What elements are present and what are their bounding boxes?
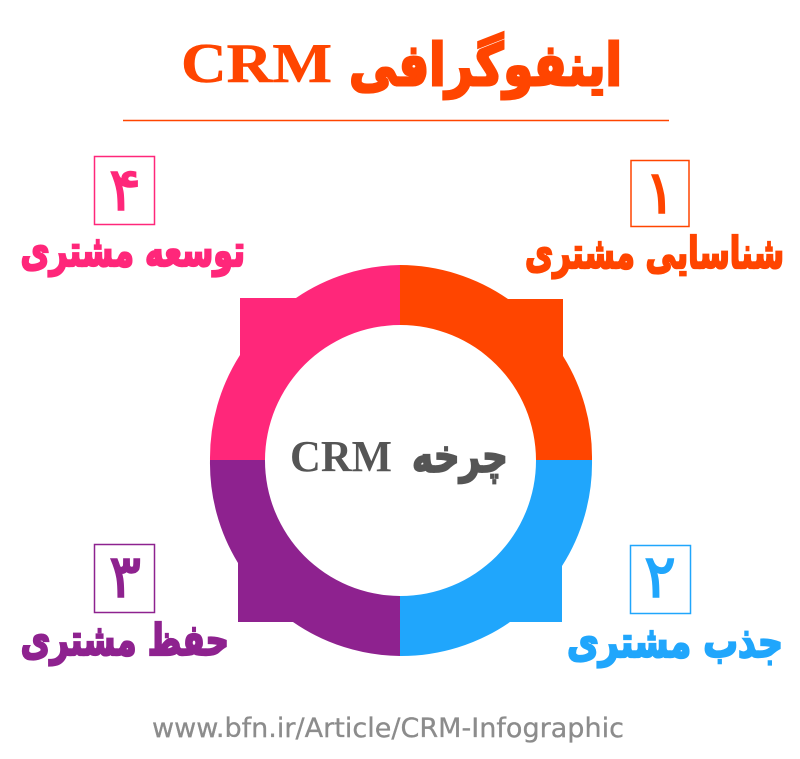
number box 3 <box>94 542 154 612</box>
panel: step 3 retention <box>21 542 229 666</box>
panel: step 2 attraction <box>567 542 783 668</box>
number box 1 <box>631 158 689 228</box>
number box 2: ۲ <box>644 542 676 612</box>
number box 1: ۱ <box>644 158 676 228</box>
label 2: جذب مشتری <box>567 617 783 668</box>
source url: www.bfn.ir/Article/CRM-Infographic <box>152 713 624 744</box>
number box 4: ۴ <box>109 155 141 225</box>
title: CRM <box>181 33 332 95</box>
panel: step 1 identification <box>525 158 784 278</box>
centre label <box>290 428 508 484</box>
number box 3: ۳ <box>109 542 141 612</box>
segment 4 pink <box>210 265 400 460</box>
title: اینفوگرافی <box>349 32 622 99</box>
label 3: حفظ مشتری <box>21 615 229 666</box>
panel: step 4 development <box>21 155 245 276</box>
title <box>181 32 622 99</box>
segment 3 purple <box>210 460 400 656</box>
number box 4 <box>94 155 154 225</box>
number box 2 <box>630 542 690 614</box>
label 1: شناسایی مشتری <box>525 228 784 278</box>
centre label: CRM <box>290 432 392 481</box>
centre label: چرخه <box>412 428 508 484</box>
chart: CRM cycle ring <box>210 265 592 656</box>
segment 2 blue <box>400 460 592 656</box>
segment 1 orange <box>400 265 592 460</box>
label 4: توسعه مشتری <box>21 226 245 276</box>
